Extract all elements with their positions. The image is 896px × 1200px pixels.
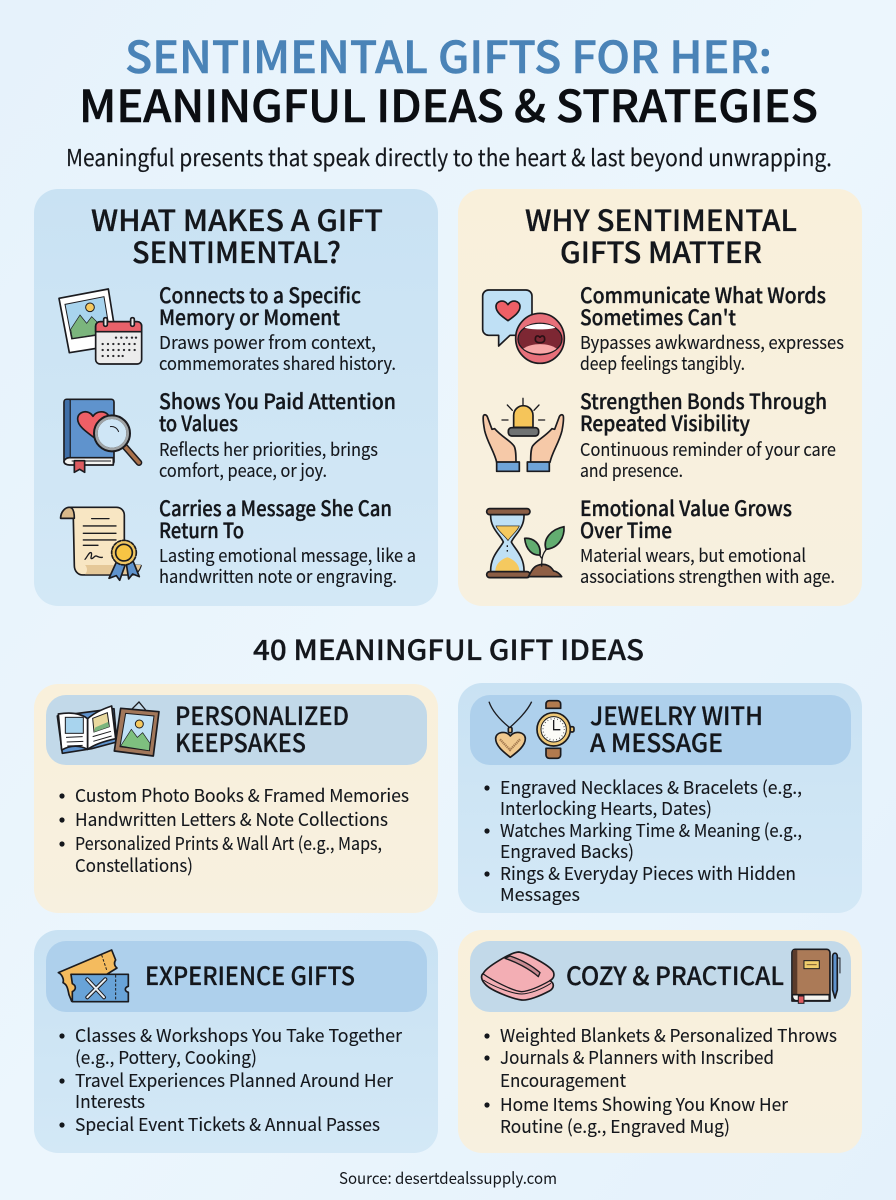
heading: what makes a gift sentimental: WHAT MAKES A GIFT xyxy=(91,198,383,240)
panel: experience gifts xyxy=(34,930,438,1153)
panel: personalized keepsakes xyxy=(34,684,438,913)
list: jewelry with a message: Interlocking Hearts, Dates) xyxy=(500,795,712,821)
item: strengthen bonds: Repeated Visibility xyxy=(580,408,751,438)
list: jewelry with a message xyxy=(484,774,802,907)
header bar: jewelry with a message xyxy=(470,695,851,765)
list: jewelry with a message: Watches Marking Time & Meaning (e.g., xyxy=(500,817,802,843)
item: carries a message xyxy=(159,493,416,589)
icon: tickets and tools xyxy=(58,950,128,1002)
item: communicate what words can't: Sometimes Can't xyxy=(580,302,736,332)
list: jewelry with a message: Rings & Everyday Pieces with Hidden xyxy=(500,860,796,886)
panel: cozy and practical xyxy=(458,930,862,1153)
panel: what makes a gift sentimental xyxy=(34,189,438,606)
item: connects to a memory: commemorates shared history. xyxy=(159,350,396,376)
list: cozy and practical: Routine (e.g., Engraved Mug) xyxy=(500,1113,730,1139)
item: connects to a memory: Draws power from context, xyxy=(159,329,376,355)
item: shows you paid attention: Shows You Paid Attention xyxy=(159,386,396,416)
icon: book and magnifier xyxy=(64,399,139,472)
item: shows you paid attention: Reflects her priorities, brings xyxy=(159,436,378,462)
item: carries a message: handwritten note or engraving. xyxy=(159,563,397,589)
heading: what makes a gift sentimental xyxy=(91,198,383,272)
list: cozy and practical: Home Items Showing You Know Her xyxy=(500,1091,789,1117)
icon: hands holding a bell xyxy=(483,398,564,471)
item: emotional value grows xyxy=(580,493,835,589)
title xyxy=(79,22,818,135)
icon: heart necklace and watch xyxy=(489,701,574,758)
item: connects to a memory: Memory or Moment xyxy=(159,302,340,332)
subtitle: Meaningful presents that speak directly to the heart & last beyond unwrapping. xyxy=(66,139,832,173)
list: personalized keepsakes: Personalized Prints & Wall Art (e.g., Maps, xyxy=(75,830,382,856)
header bar: jewelry with a message: JEWELRY WITH xyxy=(590,697,763,733)
section heading: 40 MEANINGFUL GIFT IDEAS xyxy=(253,629,644,669)
icon: folded blanket xyxy=(482,952,554,1000)
item: strengthen bonds xyxy=(580,386,836,483)
heading: why sentimental gifts matter xyxy=(525,198,797,272)
item: strengthen bonds: and presence. xyxy=(580,457,683,483)
list: personalized keepsakes: Constellations) xyxy=(75,852,193,878)
header bar: experience gifts xyxy=(46,941,427,1012)
item: communicate what words can't: deep feelings tangibly. xyxy=(580,350,745,376)
list: experience gifts: Interests xyxy=(75,1088,145,1114)
icon: speech bubble and mouth xyxy=(483,290,564,363)
item: carries a message: Lasting emotional message, like a xyxy=(159,542,416,568)
header bar: jewelry with a message: A MESSAGE xyxy=(590,724,723,760)
item: communicate what words can't xyxy=(580,280,844,376)
list: jewelry with a message: Messages xyxy=(500,881,580,907)
icon: photo and calendar xyxy=(59,289,142,364)
list: jewelry with a message: Engraved Backs) xyxy=(500,838,634,864)
item: strengthen bonds: Strengthen Bonds Through xyxy=(580,386,827,416)
list: cozy and practical: Encouragement xyxy=(500,1067,626,1093)
item: shows you paid attention: comfort, peace, or joy. xyxy=(159,457,327,483)
header bar: cozy and practical: COZY & PRACTICAL xyxy=(566,957,784,993)
list: experience gifts: Classes & Workshops You Take Together xyxy=(75,1022,403,1048)
item: emotional value grows: Material wears, but emotional xyxy=(580,542,806,568)
panel: jewelry with a message xyxy=(458,683,862,913)
list: cozy and practical: Weighted Blankets & Personalized Throws xyxy=(500,1022,837,1048)
item: connects to a memory xyxy=(159,280,396,376)
source footer: Source: desertdealssupply.com xyxy=(339,1165,557,1189)
item: emotional value grows: Over Time xyxy=(580,515,672,545)
icon: hourglass and sprout xyxy=(487,509,564,578)
header bar: experience gifts: EXPERIENCE GIFTS xyxy=(145,957,355,993)
heading: why sentimental gifts matter: GIFTS MATTER xyxy=(560,230,762,272)
item: strengthen bonds: Continuous reminder of your care xyxy=(580,436,836,462)
heading: what makes a gift sentimental: SENTIMENTAL? xyxy=(132,230,341,272)
list: cozy and practical xyxy=(484,1022,837,1139)
list: experience gifts: Travel Experiences Planned Around Her xyxy=(75,1067,394,1093)
list: cozy and practical: Journals & Planners with Inscribed xyxy=(500,1044,774,1070)
title: MEANINGFUL IDEAS & STRATEGIES xyxy=(79,71,818,135)
item: carries a message: Return To xyxy=(159,515,244,545)
header bar: personalized keepsakes: KEEPSAKES xyxy=(175,724,306,760)
icon: scroll and rosette xyxy=(61,507,141,580)
icon: photo book and frame xyxy=(57,702,159,756)
item: connects to a memory: Connects to a Specific xyxy=(159,280,361,310)
item: communicate what words can't: Communicate What Words xyxy=(580,280,826,310)
header bar: personalized keepsakes: PERSONALIZED xyxy=(175,697,349,733)
icon: journal and pen xyxy=(792,949,840,1003)
item: communicate what words can't: Bypasses awkwardness, expresses xyxy=(580,329,844,355)
list: experience gifts xyxy=(59,1022,403,1137)
header bar: cozy and practical xyxy=(470,941,851,1012)
list: experience gifts: Special Event Tickets & Annual Passes xyxy=(75,1111,380,1137)
list: personalized keepsakes: Handwritten Letters & Note Collections xyxy=(75,806,388,832)
list: personalized keepsakes: Custom Photo Books & Framed Memories xyxy=(75,782,409,808)
item: shows you paid attention: to Values xyxy=(159,408,238,438)
panel: why sentimental gifts matter xyxy=(458,189,862,606)
list: jewelry with a message: Engraved Necklaces & Bracelets (e.g., xyxy=(500,774,802,800)
heading: why sentimental gifts matter: WHY SENTIMENTAL xyxy=(525,198,797,240)
item: emotional value grows: Emotional Value Grows xyxy=(580,493,792,523)
item: emotional value grows: associations strengthen with age. xyxy=(580,563,835,589)
item: shows you paid attention xyxy=(159,386,396,483)
header bar: personalized keepsakes xyxy=(46,695,427,765)
list: experience gifts: (e.g., Pottery, Cooking) xyxy=(75,1044,257,1070)
title: SENTIMENTAL GIFTS FOR HER: xyxy=(125,22,772,86)
list: personalized keepsakes xyxy=(59,782,409,878)
item: carries a message: Carries a Message She Can xyxy=(159,493,392,523)
